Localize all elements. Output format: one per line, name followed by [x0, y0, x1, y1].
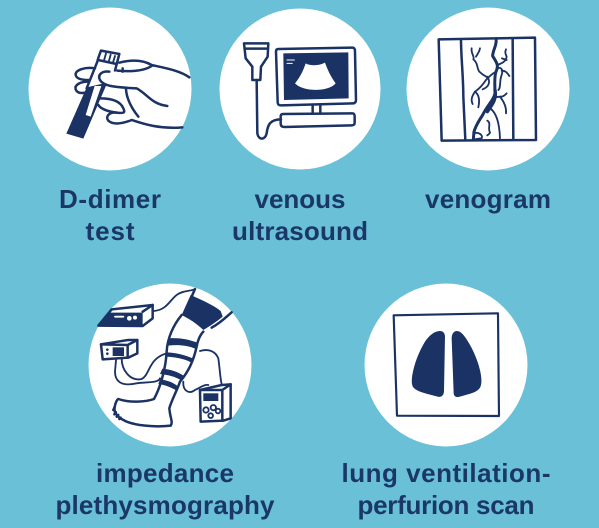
label: impedance plethysmography: [56, 458, 275, 520]
circle: ultrasound background: [220, 8, 380, 170]
circle: impedance background: [88, 284, 252, 446]
label: D-dimer test: [59, 184, 161, 246]
label: D-dimer test: test: [86, 216, 135, 246]
label: venogram: venogram: [425, 184, 551, 214]
icon: ultrasound machine: [244, 43, 356, 139]
circle: lung scan background: [364, 284, 528, 446]
label: impedance plethysmography: plethysmography: [56, 490, 275, 520]
panel: impedance plethysmography: [88, 284, 252, 446]
label: D-dimer test: D-dimer: [59, 184, 161, 214]
panel: venous ultrasound: [220, 8, 380, 170]
label: venous ultrasound: venous: [254, 184, 346, 214]
label: venous ultrasound: ultrasound: [232, 216, 368, 246]
icon: lung scan: [394, 313, 499, 416]
panel: lung ventilation-perfusion scan: [364, 284, 528, 446]
label: venous ultrasound: [232, 184, 368, 246]
icon: hand holding test tube: [66, 51, 189, 139]
circle: D-dimer background: [28, 8, 192, 170]
label: impedance plethysmography: impedance: [96, 458, 234, 488]
label: lung ventilation-perfusion scan: perfurion scan: [358, 490, 534, 520]
label: lung ventilation-perfusion scan: [342, 458, 550, 520]
panel: D-dimer test: [28, 8, 192, 170]
panel: venogram: [406, 8, 570, 170]
label: lung ventilation-perfusion scan: lung ventilation-: [342, 458, 550, 488]
icon: venogram x-ray: [439, 38, 536, 141]
circle: venogram background: [406, 8, 570, 170]
icon: leg with cuffs and monitors: [98, 289, 232, 426]
